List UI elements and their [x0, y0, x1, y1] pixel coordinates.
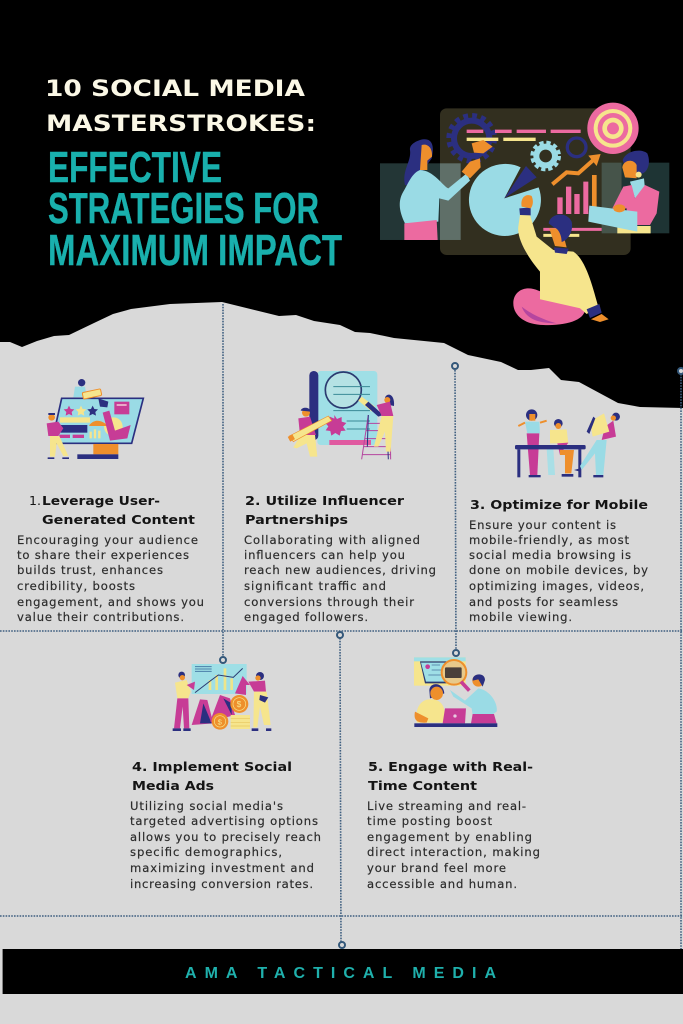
text block: Collaborating with aligned	[244, 533, 420, 547]
text block: Utilizing social media's	[130, 799, 283, 813]
heading: 2. Utilize Influencer	[245, 493, 405, 508]
text block: Live streaming and real-	[367, 799, 526, 813]
text block: builds trust, enhances	[17, 563, 163, 577]
text block: and posts for seamless	[469, 595, 618, 609]
text block	[367, 799, 540, 891]
icon: growth chart with coins: $	[218, 717, 223, 726]
text block: time posting boost	[367, 814, 492, 828]
text block: mobile-friendly, as most	[469, 533, 629, 547]
black header background	[0, 0, 683, 420]
heading: 3. Optimize for Mobile	[470, 497, 648, 512]
text block: your brand feel more	[367, 861, 506, 875]
heading: 5. Engage with Real-	[368, 759, 533, 774]
footer bar	[3, 949, 683, 994]
icon: live stream search	[414, 657, 497, 727]
icon: growth chart with coins	[173, 664, 271, 731]
text block: credibility, boosts	[17, 579, 135, 593]
heading	[368, 759, 533, 793]
text block: engagement, and shows you	[17, 595, 204, 609]
text block: Ensure your content is	[469, 518, 616, 532]
icon: magnifier over document	[288, 371, 394, 459]
torn grey paper panel	[0, 302, 683, 1024]
text block	[244, 533, 436, 624]
heading: 4. Implement Social	[132, 759, 292, 774]
heading: Partnerships	[245, 512, 348, 527]
text block: done on mobile devices, by	[469, 563, 648, 577]
text block: direct interaction, making	[367, 845, 540, 859]
text block: engaged followers.	[244, 610, 368, 624]
title: STRATEGIES FOR	[48, 184, 319, 233]
text block: mobile viewing.	[469, 610, 572, 624]
title	[45, 77, 342, 275]
panel 4: social media ads	[130, 664, 321, 891]
panel 2: influencer partnerships	[244, 371, 436, 624]
title: MAXIMUM IMPACT	[48, 226, 342, 275]
text block: accessible and human.	[367, 877, 517, 891]
text block	[469, 518, 648, 624]
hero illustration: team around a strategy board	[380, 103, 669, 325]
text block: allows you to precisely reach	[130, 830, 321, 844]
icon: team around table	[515, 409, 620, 477]
text block: Encouraging your audience	[17, 533, 198, 547]
text block: conversions through their	[244, 595, 414, 609]
text block: significant traffic and	[244, 579, 386, 593]
text block: specific demographics,	[130, 845, 282, 859]
heading: Leverage User-	[42, 493, 160, 508]
heading	[132, 759, 292, 793]
title: 10 SOCIAL MEDIA	[45, 77, 305, 102]
heading: Time Content	[368, 778, 477, 793]
icon: monitor with people	[47, 379, 143, 459]
heading: Generated Content	[42, 512, 195, 527]
text block: increasing conversion rates.	[130, 877, 313, 891]
title: MASTERSTROKES:	[46, 112, 316, 137]
heading	[29, 493, 195, 527]
panel 3: optimize for mobile	[469, 409, 648, 624]
text block: optimizing images, videos,	[469, 579, 644, 593]
text block: influencers can help you	[244, 548, 405, 562]
text block: social media browsing is	[469, 548, 631, 562]
heading	[245, 493, 405, 527]
text block: to share their experiences	[17, 548, 189, 562]
footer bar: AMA TACTICAL MEDIA	[185, 965, 496, 982]
heading: 1.	[29, 493, 41, 508]
icon: growth chart with coins: $	[237, 699, 242, 709]
text block: targeted advertising options	[130, 814, 318, 828]
panel 1: user-generated content	[17, 379, 204, 624]
text block: value their contributions.	[17, 610, 184, 624]
text block	[130, 799, 321, 891]
text block: reach new audiences, driving	[244, 563, 436, 577]
text block: engagement by enabling	[367, 830, 532, 844]
panel 5: real-time content	[367, 657, 540, 891]
title: EFFECTIVE	[48, 143, 222, 192]
text block	[17, 533, 204, 624]
heading: Media Ads	[132, 778, 214, 793]
text block: maximizing investment and	[130, 861, 314, 875]
